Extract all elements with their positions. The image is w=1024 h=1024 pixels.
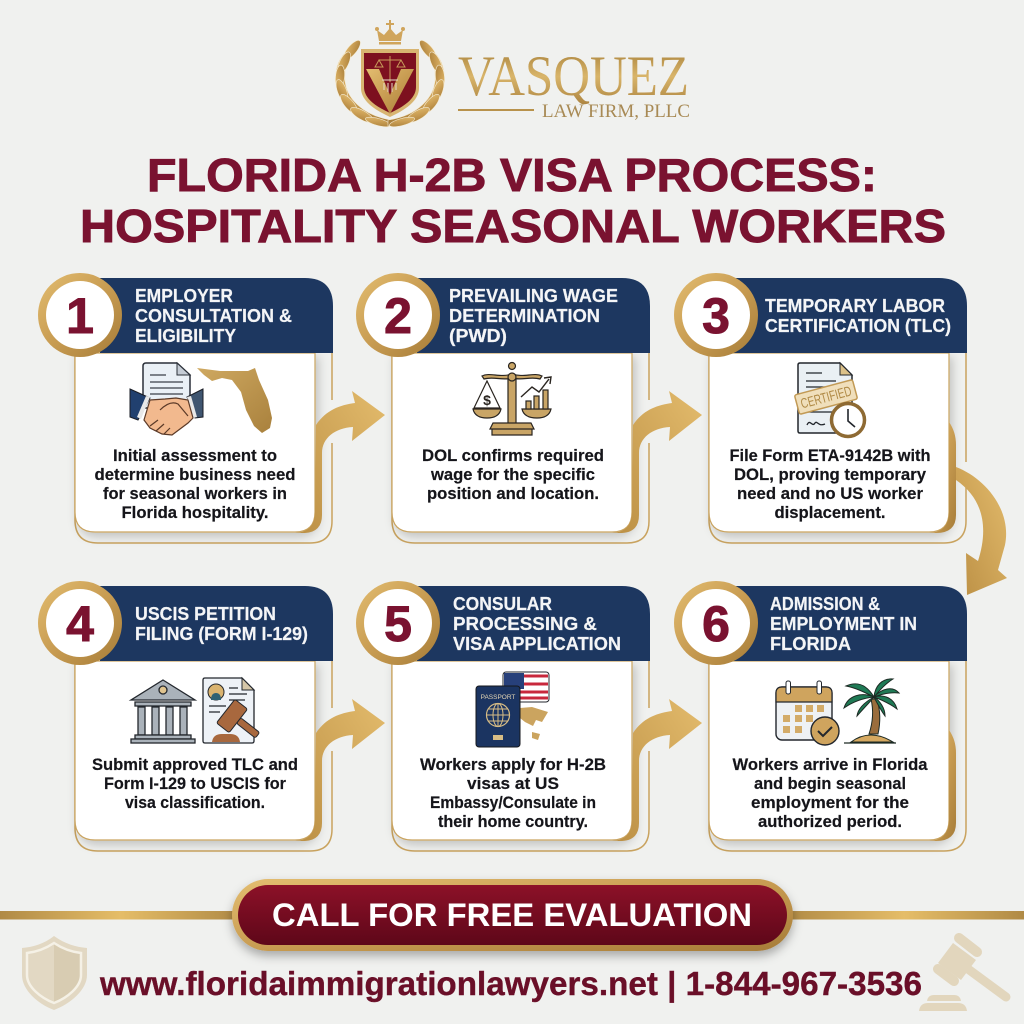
icon: shield (361, 49, 419, 117)
icon: calendar with check (776, 681, 839, 745)
text block: step 1: Initial assessment to (113, 447, 277, 465)
icon: petition and gavel (203, 678, 266, 748)
step number 2 (356, 273, 440, 357)
icon: left laurel (334, 38, 392, 129)
text block: step 6 (732, 756, 928, 831)
heading: step 4: FILING (FORM I-129) (135, 623, 308, 644)
title: FLORIDA H-2B VISA PROCESS: (147, 149, 877, 201)
text block: step 4: Submit approved TLC and (92, 756, 298, 774)
heading: step 6: EMPLOYMENT IN (770, 613, 917, 634)
text block: step 1: determine business need (94, 466, 296, 484)
text block: step 5: their home country. (438, 813, 588, 831)
step number 5 (356, 581, 440, 665)
text block: step 3: File Form ETA-9142B with (730, 447, 930, 465)
text block: step 4: Form I-129 to USCIS for (104, 775, 287, 793)
icon: right laurel (388, 38, 446, 129)
heading: step 5: CONSULAR (453, 593, 552, 614)
heading: step 2: PREVAILING WAGE (449, 285, 618, 306)
heading: step 5 (453, 593, 621, 654)
text block: step 5: Workers apply for H-2B (420, 756, 606, 774)
heading: step 3 (765, 295, 951, 336)
text block: step 2: wage for the specific (430, 466, 595, 484)
text block: step 1: Florida hospitality. (122, 504, 268, 522)
callout: call for free evaluation: CALL FOR FREE EVALUATION (272, 897, 752, 933)
panel: step 2 (356, 273, 650, 543)
panel: step 3 (674, 273, 967, 543)
icon: gavel watermark (919, 938, 1006, 1011)
heading: step 6 (770, 593, 917, 654)
heading: step 1: CONSULTATION & (135, 305, 292, 326)
text block: step 2 (422, 447, 604, 503)
text block: step 2: DOL confirms required (422, 447, 604, 465)
side strip: step 6 (929, 730, 956, 841)
text block: step 6: employment for the (751, 794, 909, 812)
icon: world map fragment (520, 707, 548, 740)
contact line: www.floridaimmigrationlawyers.net | 1-844-967-3536 (99, 965, 922, 1002)
panel: step 4 (38, 581, 333, 851)
heading: step 6: ADMISSION & (770, 593, 880, 614)
step number 6: 6 (702, 596, 730, 652)
icon: crown (375, 20, 405, 44)
icon: shield watermark (22, 936, 87, 1010)
icon: passport: PASSPORT (481, 694, 515, 701)
text block: step 6: and begin seasonal (754, 775, 906, 793)
heading: step 1: EMPLOYER (135, 285, 233, 306)
text block: step 4 (92, 756, 298, 812)
logo subtitle: LAW FIRM, PLLC (542, 101, 690, 122)
heading: step 5: VISA APPLICATION (453, 633, 621, 654)
heading: step 3: CERTIFICATION (TLC) (765, 315, 951, 336)
icon: certified document and clock (794, 363, 864, 436)
icon: flag (503, 672, 549, 702)
text block: step 6: Workers arrive in Florida (732, 756, 928, 774)
text block: step 3: need and no US worker (737, 485, 924, 503)
icon: scales with money and chart (473, 362, 551, 435)
icon: handshake and document (130, 363, 203, 435)
title: HOSPITALITY SEASONAL WORKERS (80, 200, 946, 252)
step number 1: 1 (66, 288, 94, 344)
text block: step 5 (420, 756, 606, 831)
text block: step 6: authorized period. (758, 813, 902, 831)
logo: Vasquez Law Firm (334, 20, 690, 129)
arrow: step 4 to 5 (295, 699, 385, 841)
arrow: step 2 to 3 (612, 391, 702, 533)
heading: step 3: TEMPORARY LABOR (765, 295, 945, 316)
callout: call for free evaluation (232, 879, 793, 951)
step number 6 (674, 581, 758, 665)
step number 5: 5 (384, 596, 412, 652)
heading: step 1: ELIGIBILITY (135, 325, 237, 346)
icon: Florida map (197, 368, 272, 433)
heading: step 5: PROCESSING & (453, 613, 597, 634)
panel: step 6 (674, 581, 967, 851)
heading: step 2 (449, 285, 618, 346)
text block: step 1 (94, 447, 296, 522)
text block: step 5: visas at US (467, 775, 559, 793)
step number 1 (38, 273, 122, 357)
step number 2: 2 (384, 288, 412, 344)
arrow: step 3 to 6 (956, 467, 1007, 595)
text block: step 4: visa classification. (125, 794, 265, 812)
text block: step 5: Embassy/Consulate in (430, 794, 596, 812)
text block: step 3 (730, 447, 930, 522)
text block: step 3: displacement. (774, 504, 886, 522)
heading: step 4 (135, 603, 308, 644)
step number 4 (38, 581, 122, 665)
heading: step 4: USCIS PETITION (135, 603, 276, 624)
icon label: dollar sign: $ (483, 392, 491, 408)
heading: step 1 (135, 285, 292, 346)
text block: step 2: position and location. (427, 485, 599, 503)
divider bars (0, 911, 1024, 920)
heading: step 6: FLORIDA (770, 633, 851, 654)
logo wordmark: VASQUEZ (458, 45, 689, 108)
arrow: step 1 to 2 (295, 391, 385, 533)
icon: courthouse (131, 680, 195, 743)
panel: step 1 (38, 273, 333, 543)
heading: step 2: (PWD) (449, 325, 507, 346)
arrow: step 5 to 6 (612, 699, 702, 841)
heading: step 2: DETERMINATION (449, 305, 600, 326)
text block: step 1: for seasonal workers in (103, 485, 287, 503)
step number 4: 4 (66, 596, 94, 652)
panel: step 5 (356, 581, 650, 851)
title (80, 149, 946, 252)
icon: palm tree (844, 679, 899, 743)
side strip: step 3 (929, 422, 956, 533)
step number 3 (674, 273, 758, 357)
step number 3: 3 (702, 288, 730, 344)
text block: step 3: DOL, proving temporary (734, 466, 927, 484)
icon: certified document and clock: CERTIFIED (799, 383, 853, 411)
icon: passport (476, 686, 520, 747)
